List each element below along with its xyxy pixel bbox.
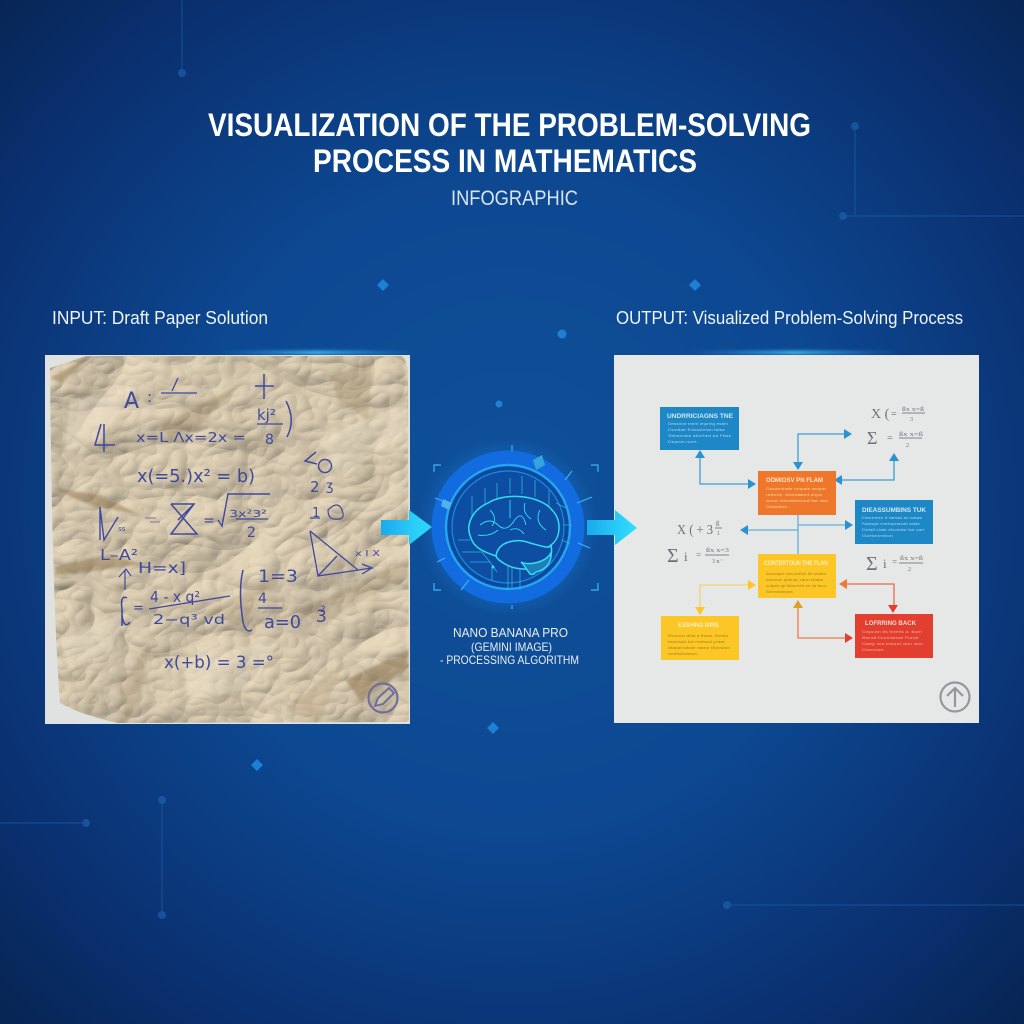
formulas: ßx x=ß <box>902 406 924 413</box>
brain outline <box>469 496 559 574</box>
title <box>208 107 811 179</box>
box: looking back: Daunrse. <box>862 648 885 652</box>
box: carry out plan <box>758 554 836 598</box>
formulas: 1 <box>717 531 720 537</box>
box: looking back: Daep ars intunrt aun ann <box>862 642 923 646</box>
box: disassembling: Danmere it tarsat at natas <box>862 516 922 520</box>
formulas: = <box>887 433 893 444</box>
box: looking back: LOFRRING BACK <box>865 620 916 627</box>
handwritten equations: 8 <box>265 432 274 448</box>
handwritten equations: 2 <box>247 525 256 541</box>
handwritten equations: 2 <box>320 605 326 615</box>
box: carry out plan: Seenhalepas <box>766 590 793 594</box>
box: devise plan: ODMIOSV PN FLAM <box>766 477 823 484</box>
box: looking back: Bandt Dunnamal Fundr <box>862 636 920 640</box>
box: examine: Esssser dhla a fhass. Sehlia <box>668 634 729 638</box>
icon: pencil badge <box>368 684 398 712</box>
handwritten equations: 2 <box>310 478 320 496</box>
input heading: INPUT: Draft Paper Solution <box>52 307 268 328</box>
box: examine: bomsan bd nwmad yntar <box>668 640 726 644</box>
panel: output flowchart <box>614 351 979 723</box>
formulas: Σ <box>867 428 877 448</box>
panel: input draft paper <box>45 351 417 724</box>
handwritten equations: 4 <box>258 591 267 607</box>
handwritten equations: x I X <box>355 549 381 558</box>
formulas: 3 n⁻ <box>712 559 723 565</box>
arrow: processor to output <box>587 510 637 545</box>
box: disassembling: Defalt Uate ebundar tse carl <box>862 528 924 532</box>
icon: AI brain processor <box>418 437 598 617</box>
subtitle: INFOGRAPHIC <box>451 187 578 210</box>
box: devise plan: Detamber - <box>766 505 791 509</box>
box: understanding <box>660 407 739 450</box>
handwritten equations: 1=3 <box>258 567 298 587</box>
processor label: - PROCESSING ALGORITHM <box>440 653 579 667</box>
box: carry out plan: solpsh up faberned on ist face. <box>766 584 827 588</box>
box: understanding: Selumnise aborhed tor Fiars <box>668 434 731 438</box>
handwritten equations: A <box>124 389 139 414</box>
box: devise plan: anne mertabelned ise ass <box>766 499 828 503</box>
processor label <box>440 625 579 667</box>
box: carry out plan: CONTERTOUN THE FLAN <box>764 560 828 567</box>
box: examine: dialad wbde name fdnrshle <box>668 646 730 650</box>
box: looking back <box>855 614 933 658</box>
box: devise plan <box>758 471 836 515</box>
box: understanding: Dessrine ment impring esten <box>668 422 728 426</box>
formulas: i <box>684 549 688 564</box>
tick marks <box>434 445 598 609</box>
arrow: input to processor <box>381 510 432 545</box>
formulas: Σ <box>866 553 878 575</box>
handwritten equations: 3x²3² <box>229 509 267 520</box>
box: examine: EXSHING MIRE <box>678 622 720 629</box>
handwritten equations: x(+b) = 3 =° <box>164 653 274 673</box>
formulas: = <box>892 557 897 567</box>
handwritten equations: L–A² <box>100 546 138 564</box>
handwritten equations: ss <box>118 525 126 533</box>
title: PROCESS IN MATHEMATICS <box>313 143 697 179</box>
handwritten equations: = <box>203 513 215 529</box>
formulas: = <box>696 550 701 560</box>
handwritten equations: kj² <box>257 406 276 424</box>
box: carry out plan: Annoxpe una anfish dli shalm <box>766 572 827 576</box>
handwritten equations: : <box>147 388 152 406</box>
box: disassembling: Gortonmtion <box>862 534 893 538</box>
formulas: ßx x=ß <box>900 555 923 562</box>
title: VISUALIZATION OF THE PROBLEM-SOLVING <box>208 107 811 143</box>
handwritten equations: 3 <box>316 607 327 627</box>
handwritten equations: = <box>133 601 144 616</box>
box: examine <box>661 616 739 660</box>
formulas: X ( <box>871 407 890 422</box>
box: carry out plan: sanmue qtsk.ar, ranc shaba <box>766 578 824 582</box>
formulas: ß <box>716 520 720 528</box>
handwritten equations: 4 - x q² <box>150 588 200 606</box>
handwritten equations: H=x] <box>138 559 186 577</box>
output heading: OUTPUT: Visualized Problem-Solving Process <box>616 307 963 328</box>
formulas: i <box>883 556 887 571</box>
handwritten equations: 2−q³ vd <box>153 613 225 628</box>
handwritten equations <box>95 374 381 673</box>
box: disassembling <box>855 500 933 544</box>
icon: up arrow badge <box>940 682 970 712</box>
box: understanding: Depron nore. <box>668 440 698 444</box>
box: disassembling: DIEASSUMBINS TUK <box>862 507 926 514</box>
formulas: Σ <box>667 545 679 567</box>
handwritten equations: 1 <box>312 506 320 521</box>
formulas <box>667 406 925 575</box>
circuit traces <box>458 476 572 590</box>
formulas: ßx x=ß <box>899 431 923 438</box>
box: understanding: UNDRRICIAGNS TNE <box>667 413 734 420</box>
box: disassembling: Nadupt mehamauet sdsk <box>862 522 920 526</box>
formulas: 2 <box>906 443 909 449</box>
box: devise plan: Dasaminate ompate ampar <box>766 487 827 491</box>
handwritten equations: x(=5.)x² = b) <box>137 466 255 487</box>
processor label: NANO BANANA PRO <box>453 625 568 640</box>
connector arrows <box>700 434 894 638</box>
handwritten equations: ʒ <box>326 479 334 494</box>
diamond accents <box>251 279 701 771</box>
box: looking back: Dapcan tis bnmls a :tium <box>862 630 922 634</box>
formulas: = <box>891 409 897 420</box>
formulas: X ( + 3 <box>677 523 713 538</box>
formulas: 2 <box>908 567 911 573</box>
box: understanding: Dundae Edmarman talse <box>668 428 725 432</box>
formulas: 3 <box>910 417 913 423</box>
box: devise plan: refenre. tekedabed anpa <box>766 493 823 497</box>
formulas: ßx x=3 <box>706 547 729 554</box>
processor label: (GEMINI IMAGE) <box>471 640 552 654</box>
handwritten equations: x=L Λx=2x = <box>136 431 246 446</box>
handwritten equations: a=0 <box>264 612 301 633</box>
box: examine: tonfdsheleam. <box>668 652 698 656</box>
